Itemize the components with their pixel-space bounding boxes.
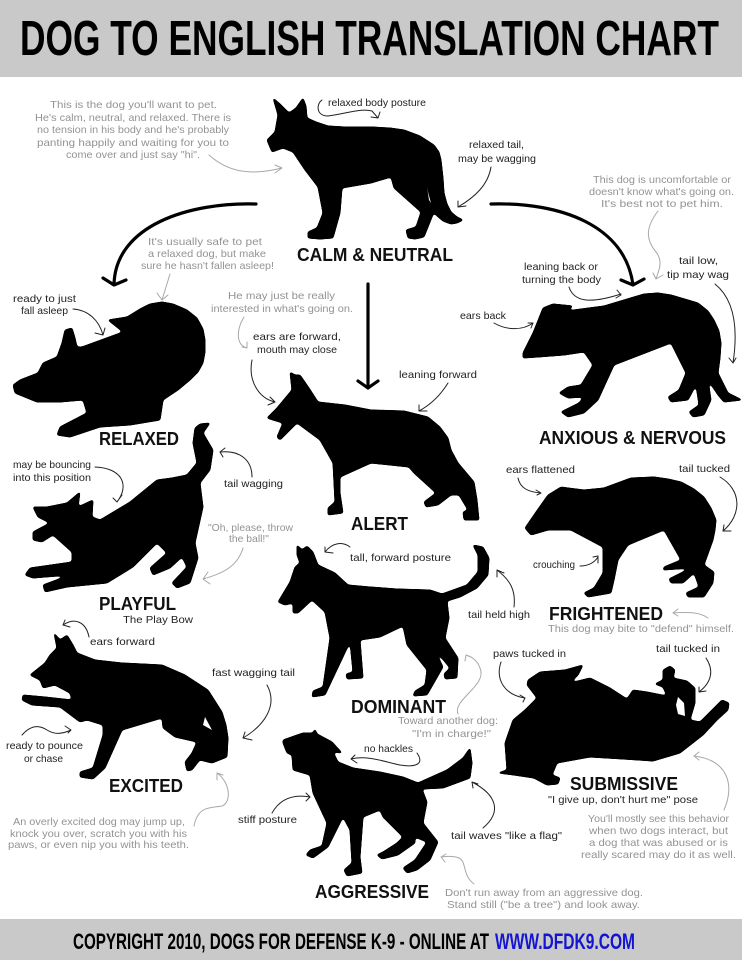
annotation: ears are forward: ears are forward, xyxy=(253,331,341,343)
detail: gap between hind legs xyxy=(427,187,431,203)
dog state label: frightened: FRIGHTENED xyxy=(549,604,663,624)
annotation: ready to just fall asleep: ready to just xyxy=(13,293,76,305)
dog state label: anxious and nervous: ANXIOUS & NERVOUS xyxy=(539,428,726,448)
silhouette: dominant dog xyxy=(278,545,489,697)
dog state label: submissive: SUBMISSIVE xyxy=(570,774,678,794)
annotation: leaning back: leaning back or xyxy=(524,261,599,273)
annotation: tail tucked in: tail tucked in xyxy=(656,643,720,655)
annotation: stiff posture xyxy=(238,793,310,826)
annotation: tail held high xyxy=(468,570,530,621)
annotation: paws tucked in: paws tucked in xyxy=(493,648,566,660)
silhouette: submissive dog xyxy=(498,665,729,785)
annotation: crouching xyxy=(533,556,598,571)
note: mostly when two dogs interact xyxy=(581,752,736,861)
annotation: tail low: tip may wag xyxy=(667,269,729,281)
header band with title xyxy=(0,0,742,77)
annotation: no hackles: no hackles xyxy=(364,743,413,755)
note: safe to pet a relaxed dog: sure he hasn't fallen asleep! xyxy=(141,260,274,272)
dog state label: playful: PLAYFUL xyxy=(99,594,176,614)
annotation: ready to just fall asleep xyxy=(13,293,105,335)
annotation: may be bouncing xyxy=(13,459,123,502)
panel: dominant xyxy=(278,544,530,740)
note: overly excited dog: paws, or even nip you with his teeth. xyxy=(8,839,189,851)
annotation: leaning back: turning the body xyxy=(522,274,602,286)
annotation: leaning forward xyxy=(399,369,477,411)
annotation: ears are forward xyxy=(251,331,341,405)
website link: WWW.DFDK9.COM xyxy=(495,929,635,954)
note: uncomfortable dog: It's best not to pet him. xyxy=(601,198,723,210)
panel: submissive xyxy=(493,643,736,861)
note: throw the ball: "Oh, please, throw xyxy=(208,522,293,534)
note: uncomfortable dog xyxy=(589,174,734,279)
dog state label: calm and neutral: CALM & NEUTRAL xyxy=(297,245,453,265)
panel: excited xyxy=(6,620,295,851)
footer band with copyright xyxy=(0,919,742,960)
note: may bite to defend xyxy=(548,609,734,635)
dog state label: relaxed: RELAXED xyxy=(99,429,179,449)
dog state label: alert: ALERT xyxy=(351,514,408,534)
note: interested in what's going on: interested in what's going on. xyxy=(211,303,353,315)
detail: gap by the tail xyxy=(676,697,685,716)
note: mostly when two dogs interact: when two dogs interact, but xyxy=(588,825,728,837)
annotation: may be bouncing: into this position xyxy=(13,472,91,484)
annotation: stiff posture: stiff posture xyxy=(238,814,297,826)
annotation: fast wagging tail xyxy=(212,667,295,740)
annotation: may be bouncing: may be bouncing xyxy=(13,459,91,471)
annotation: tail low xyxy=(667,255,736,363)
silhouette: relaxed dog xyxy=(13,302,205,437)
subtitle: the play bow: The Play Bow xyxy=(123,614,193,626)
note: the dog you'll want to pet: no tension in his body and he's probably xyxy=(37,124,230,136)
annotation: no hackles xyxy=(351,743,420,766)
dog state label: aggressive: AGGRESSIVE xyxy=(315,882,429,902)
subtitle: i give up: "I give up, don't hurt me" pose xyxy=(548,794,698,806)
annotation: ears flattened: ears flattened xyxy=(506,464,575,476)
note: toward another dog: Toward another dog: xyxy=(398,715,498,727)
copyright text: COPYRIGHT 2010, DOGS FOR DEFENSE K-9 - ONLINE AT xyxy=(73,929,489,954)
annotation: tail waves like a flag xyxy=(451,782,562,842)
note: throw the ball xyxy=(203,522,293,584)
note: the dog you'll want to pet: come over and just say "hi". xyxy=(66,149,200,161)
annotation: tall, forward posture: tall, forward posture xyxy=(350,552,451,564)
arrow: calm to anxious xyxy=(491,204,644,285)
annotation: paws tucked in xyxy=(493,648,566,702)
silhouette: alert dog xyxy=(267,372,479,520)
silhouette: anxious dog xyxy=(523,293,742,417)
note: mostly when two dogs interact: really scared may do it as well. xyxy=(581,849,736,861)
silhouette: frightened dog xyxy=(525,477,716,597)
note: safe to pet a relaxed dog xyxy=(141,236,274,300)
annotation: ears forward xyxy=(63,620,155,648)
note: the dog you'll want to pet xyxy=(35,99,282,173)
annotation: relaxed tail: may be wagging xyxy=(458,153,536,165)
dog state label: excited: EXCITED xyxy=(109,776,183,796)
note: the dog you'll want to pet: panting happily and waiting for you to xyxy=(37,137,229,149)
annotation: relaxed body posture: relaxed body posture xyxy=(328,97,426,109)
annotation: ears forward: ears forward xyxy=(90,636,155,648)
annotation: crouching: crouching xyxy=(533,559,575,571)
panel: alert xyxy=(211,290,479,534)
dog state label: dominant: DOMINANT xyxy=(351,697,446,717)
detail: gap by the tail xyxy=(203,717,212,730)
note: don't run away: Stand still ("be a tree") and look away. xyxy=(447,899,640,911)
note: throw the ball: the ball!" xyxy=(229,533,269,545)
silhouette: excited dog xyxy=(22,633,228,779)
note: the dog you'll want to pet: This is the dog you'll want to pet. xyxy=(50,99,217,111)
note: safe to pet a relaxed dog: It's usually safe to pet xyxy=(148,236,262,248)
annotation: tail waves like a flag: tail waves "like a flag" xyxy=(451,830,562,842)
note: toward another dog xyxy=(398,655,498,740)
annotation: leaning forward: leaning forward xyxy=(399,369,477,381)
annotation: ears are forward: mouth may close xyxy=(257,344,337,356)
note: safe to pet a relaxed dog: a relaxed dog, but make xyxy=(148,248,266,260)
note: interested in what's going on: He may just be really xyxy=(228,290,336,302)
annotation: relaxed tail: relaxed tail, xyxy=(469,139,524,151)
note: uncomfortable dog: This dog is uncomfortable or xyxy=(593,174,732,186)
silhouette: aggressive dog xyxy=(283,729,472,876)
note: interested in what's going on xyxy=(211,290,353,348)
annotation: relaxed tail xyxy=(458,139,536,207)
annotation: relaxed body posture xyxy=(318,97,426,118)
note: don't run away xyxy=(441,854,643,911)
annotation: ears flattened xyxy=(506,464,575,495)
annotation: tail tucked: tail tucked xyxy=(679,463,730,475)
panel: calm and neutral xyxy=(35,97,536,265)
annotation: tail low: tail low, xyxy=(679,255,718,267)
panel: playful xyxy=(13,423,293,626)
annotation: tall, forward posture xyxy=(325,544,451,564)
note: uncomfortable dog: doesn't know what's going on. xyxy=(589,186,734,198)
silhouette: playful dog xyxy=(25,423,213,592)
note: don't run away: Don't run away from an aggressive dog. xyxy=(445,887,643,899)
panel: frightened xyxy=(506,463,737,635)
annotation: tail held high: tail held high xyxy=(468,609,530,621)
silhouette: calm dog xyxy=(267,98,463,239)
note: may bite to defend: This dog may bite to "defend" himself. xyxy=(548,623,734,635)
annotation: tail tucked xyxy=(679,463,737,531)
note: mostly when two dogs interact: a dog that was abused or is xyxy=(589,837,728,849)
annotation: tail tucked in xyxy=(656,643,720,692)
annotation: ready to pounce xyxy=(6,726,83,765)
annotation: tail wagging xyxy=(220,448,283,490)
note: the dog you'll want to pet: He's calm, neutral, and relaxed. There is xyxy=(35,112,231,124)
panel: relaxed xyxy=(13,236,274,449)
note: mostly when two dogs interact: You'll mostly see this behavior xyxy=(588,813,729,825)
annotation: ears back: ears back xyxy=(460,310,507,322)
note: overly excited dog: An overly excited dog may jump up, xyxy=(13,816,185,828)
annotation: ready to just fall asleep: fall asleep xyxy=(21,305,68,317)
annotation: leaning back xyxy=(522,261,621,300)
annotation: ready to pounce: or chase xyxy=(24,753,63,765)
annotation: ears back xyxy=(460,310,533,329)
annotation: tail wagging: tail wagging xyxy=(224,478,283,490)
arrow: calm to alert xyxy=(358,284,378,388)
note: toward another dog: "I'm in charge!" xyxy=(412,728,491,740)
annotation: fast wagging tail: fast wagging tail xyxy=(212,667,295,679)
note: overly excited dog xyxy=(8,773,228,851)
arrow: calm to relaxed xyxy=(103,204,256,285)
panel: anxious and nervous xyxy=(460,174,742,448)
annotation: ready to pounce: ready to pounce xyxy=(6,740,83,752)
panel: aggressive xyxy=(238,729,643,911)
note: overly excited dog: knock you over, scratch you with his xyxy=(10,828,187,840)
